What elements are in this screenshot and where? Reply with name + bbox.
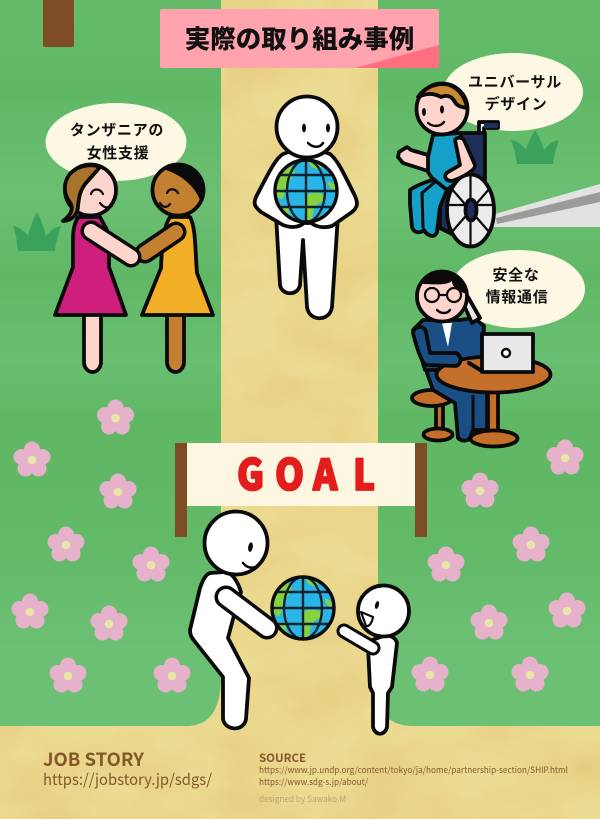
torso	[413, 318, 484, 370]
head	[417, 272, 467, 322]
title banner: 実際の取り組み事例	[185, 19, 414, 56]
woman arm	[91, 231, 131, 257]
green lawn left	[0, 0, 221, 726]
right arm	[445, 138, 475, 181]
center figure holding globe	[255, 96, 357, 318]
left arm	[398, 147, 428, 171]
shirt	[442, 323, 452, 347]
arms and torso	[255, 150, 357, 227]
hair	[418, 84, 467, 108]
footer: source: https://www.sdg-s.jp/about/	[259, 776, 369, 788]
footer: source: SOURCE	[259, 750, 306, 766]
grass tuft left	[13, 212, 61, 251]
grass tuft right	[511, 130, 559, 164]
woman head	[65, 164, 116, 216]
bubble: universal design: デザイン	[485, 93, 547, 114]
face	[243, 542, 258, 568]
partner face	[160, 189, 178, 207]
big figure passing globe	[190, 512, 268, 728]
small figure receiving globe	[344, 586, 409, 734]
wheel	[447, 174, 494, 246]
body	[190, 572, 249, 728]
goal banner: GOAL	[237, 442, 375, 503]
footer: source	[259, 750, 569, 805]
woman hair	[63, 165, 100, 221]
globe at goal	[271, 576, 334, 639]
goal banner	[175, 442, 427, 537]
legs	[276, 215, 338, 318]
pink dress	[55, 217, 126, 315]
woman face	[91, 190, 112, 207]
head	[204, 512, 268, 574]
yellow dress	[142, 217, 213, 315]
bubble: Tanzania	[46, 103, 186, 181]
head	[358, 586, 409, 636]
wheelchair user	[398, 84, 498, 246]
bubble: safe communication	[451, 250, 585, 328]
footer: brand	[43, 746, 212, 790]
arm	[344, 631, 373, 648]
handle grip	[484, 123, 498, 128]
partner hair	[163, 165, 204, 200]
flowers	[12, 400, 586, 692]
stool	[412, 390, 452, 440]
bubble: Tanzania: タンザニアの	[70, 119, 164, 140]
bubble: safe communication: 情報通信	[486, 286, 548, 307]
footer: source: designed by Sawako.M	[259, 793, 346, 805]
hair	[422, 272, 467, 294]
chair back	[440, 133, 485, 234]
footer: brand: JOB STORY	[43, 746, 144, 772]
face	[361, 601, 380, 626]
bubble: Tanzania: 女性支援	[87, 142, 149, 163]
partner legs	[167, 314, 184, 372]
partner arm	[145, 232, 176, 253]
head	[276, 96, 338, 158]
bubble: universal design	[443, 53, 583, 131]
laptop	[469, 334, 533, 372]
footer: source: https://www.jp.undp.org/content/tokyo/ja/home/partnership-section/SHIP.html	[259, 764, 569, 776]
head	[416, 84, 468, 134]
tree trunk	[43, 0, 74, 47]
green lawn right	[378, 0, 600, 726]
table base	[470, 430, 518, 446]
ramp	[493, 184, 600, 227]
legs	[410, 177, 456, 236]
body	[368, 635, 397, 734]
businessman at table	[412, 272, 550, 446]
phone	[463, 297, 480, 323]
face	[302, 124, 330, 147]
globe	[274, 159, 337, 222]
title banner	[160, 9, 439, 68]
arm	[226, 597, 267, 628]
woman legs	[84, 314, 101, 372]
footer: brand: https://jobstory.jp/sdgs/	[43, 768, 212, 790]
handle	[479, 122, 498, 135]
partner head	[152, 164, 204, 216]
table post	[488, 388, 498, 434]
bubble: universal design: ユニバーサル	[468, 71, 562, 92]
bubble: safe communication: 安全な	[492, 264, 540, 285]
face	[425, 288, 461, 313]
table top	[436, 356, 550, 392]
torso	[428, 133, 472, 190]
arm	[413, 327, 460, 366]
face	[422, 106, 444, 126]
figures: two women holding hands	[55, 164, 213, 372]
legs	[425, 367, 487, 441]
